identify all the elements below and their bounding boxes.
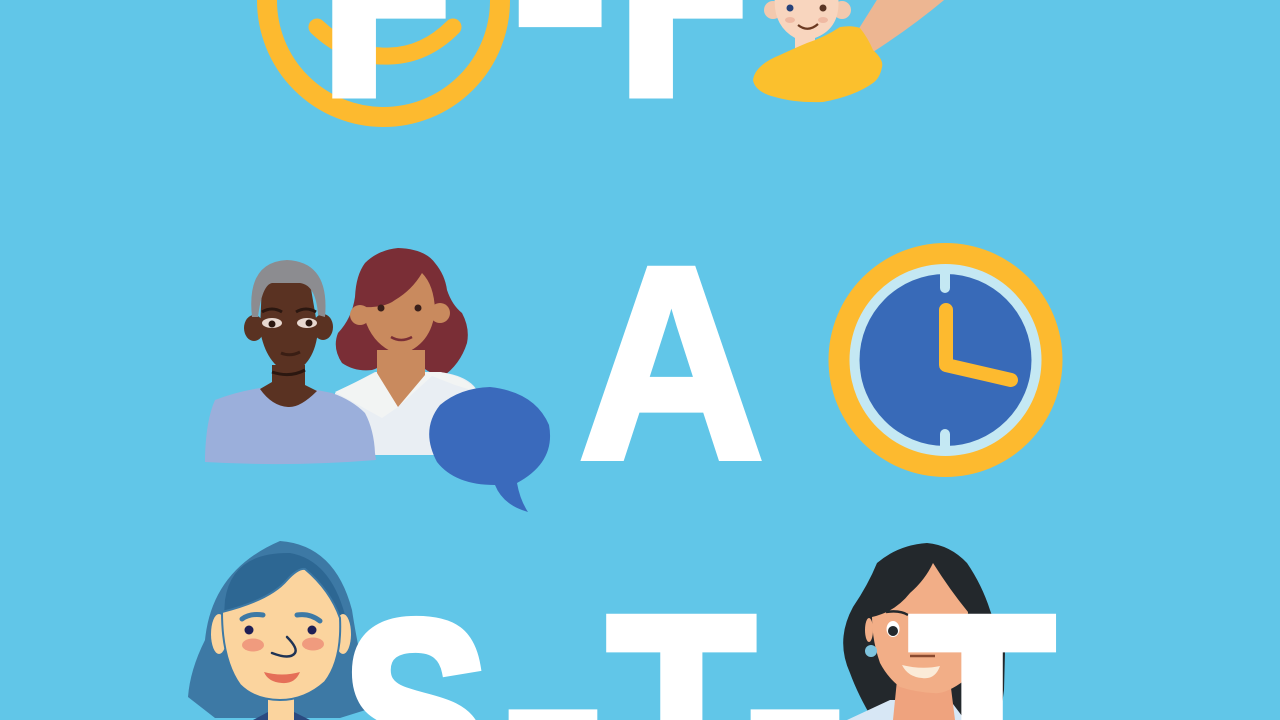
heading letter: A: A <box>578 209 765 517</box>
man with grey hair <box>205 260 376 464</box>
character: woman with black hair <box>843 543 1005 720</box>
woman with wavy hair <box>335 248 478 455</box>
icon: smiley face ring <box>267 0 500 117</box>
icon: man and woman talking <box>205 248 550 512</box>
heading letters: S-T-T <box>342 558 1055 720</box>
speech bubble <box>429 387 550 512</box>
character: woman with blue hair <box>188 541 372 720</box>
icon: clock <box>828 243 1062 477</box>
icon: baby waving <box>753 0 950 102</box>
heading letters: F-F <box>327 0 745 154</box>
